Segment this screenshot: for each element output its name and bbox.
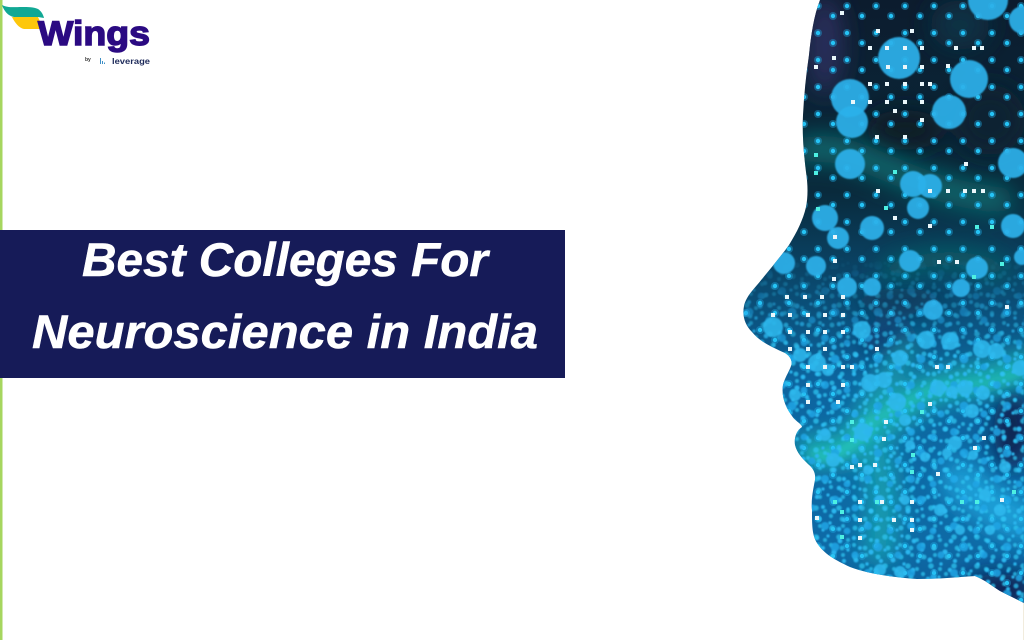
left green edge line	[0, 0, 2, 640]
right cream edge below face	[1023, 603, 1024, 640]
title banner	[0, 230, 565, 378]
banner panel	[0, 230, 565, 378]
icon: leverage bars	[100, 58, 105, 64]
text: leverage: leverage	[112, 57, 151, 66]
digital human face profile	[730, 0, 1024, 640]
title line 2: Neuroscience in India	[32, 305, 538, 358]
dark mottling	[807, 0, 1024, 606]
icon: teal and yellow ribbon	[2, 5, 44, 29]
title line 1: Best Colleges For	[82, 233, 491, 286]
teal glow bands	[806, 149, 1024, 550]
bright cyan accent squares	[814, 153, 1016, 539]
logo: Wings by leverage	[2, 5, 151, 66]
small scattered blue dots	[743, 2, 1024, 603]
medium glowing circles, lower face	[763, 317, 1024, 578]
white and cyan data squares	[771, 11, 1009, 540]
face base	[730, 0, 1024, 640]
text: by: by	[85, 57, 91, 63]
large glowing circles, forehead and cheek	[773, 0, 1024, 320]
wordmark: Wings: Wings	[38, 15, 150, 53]
